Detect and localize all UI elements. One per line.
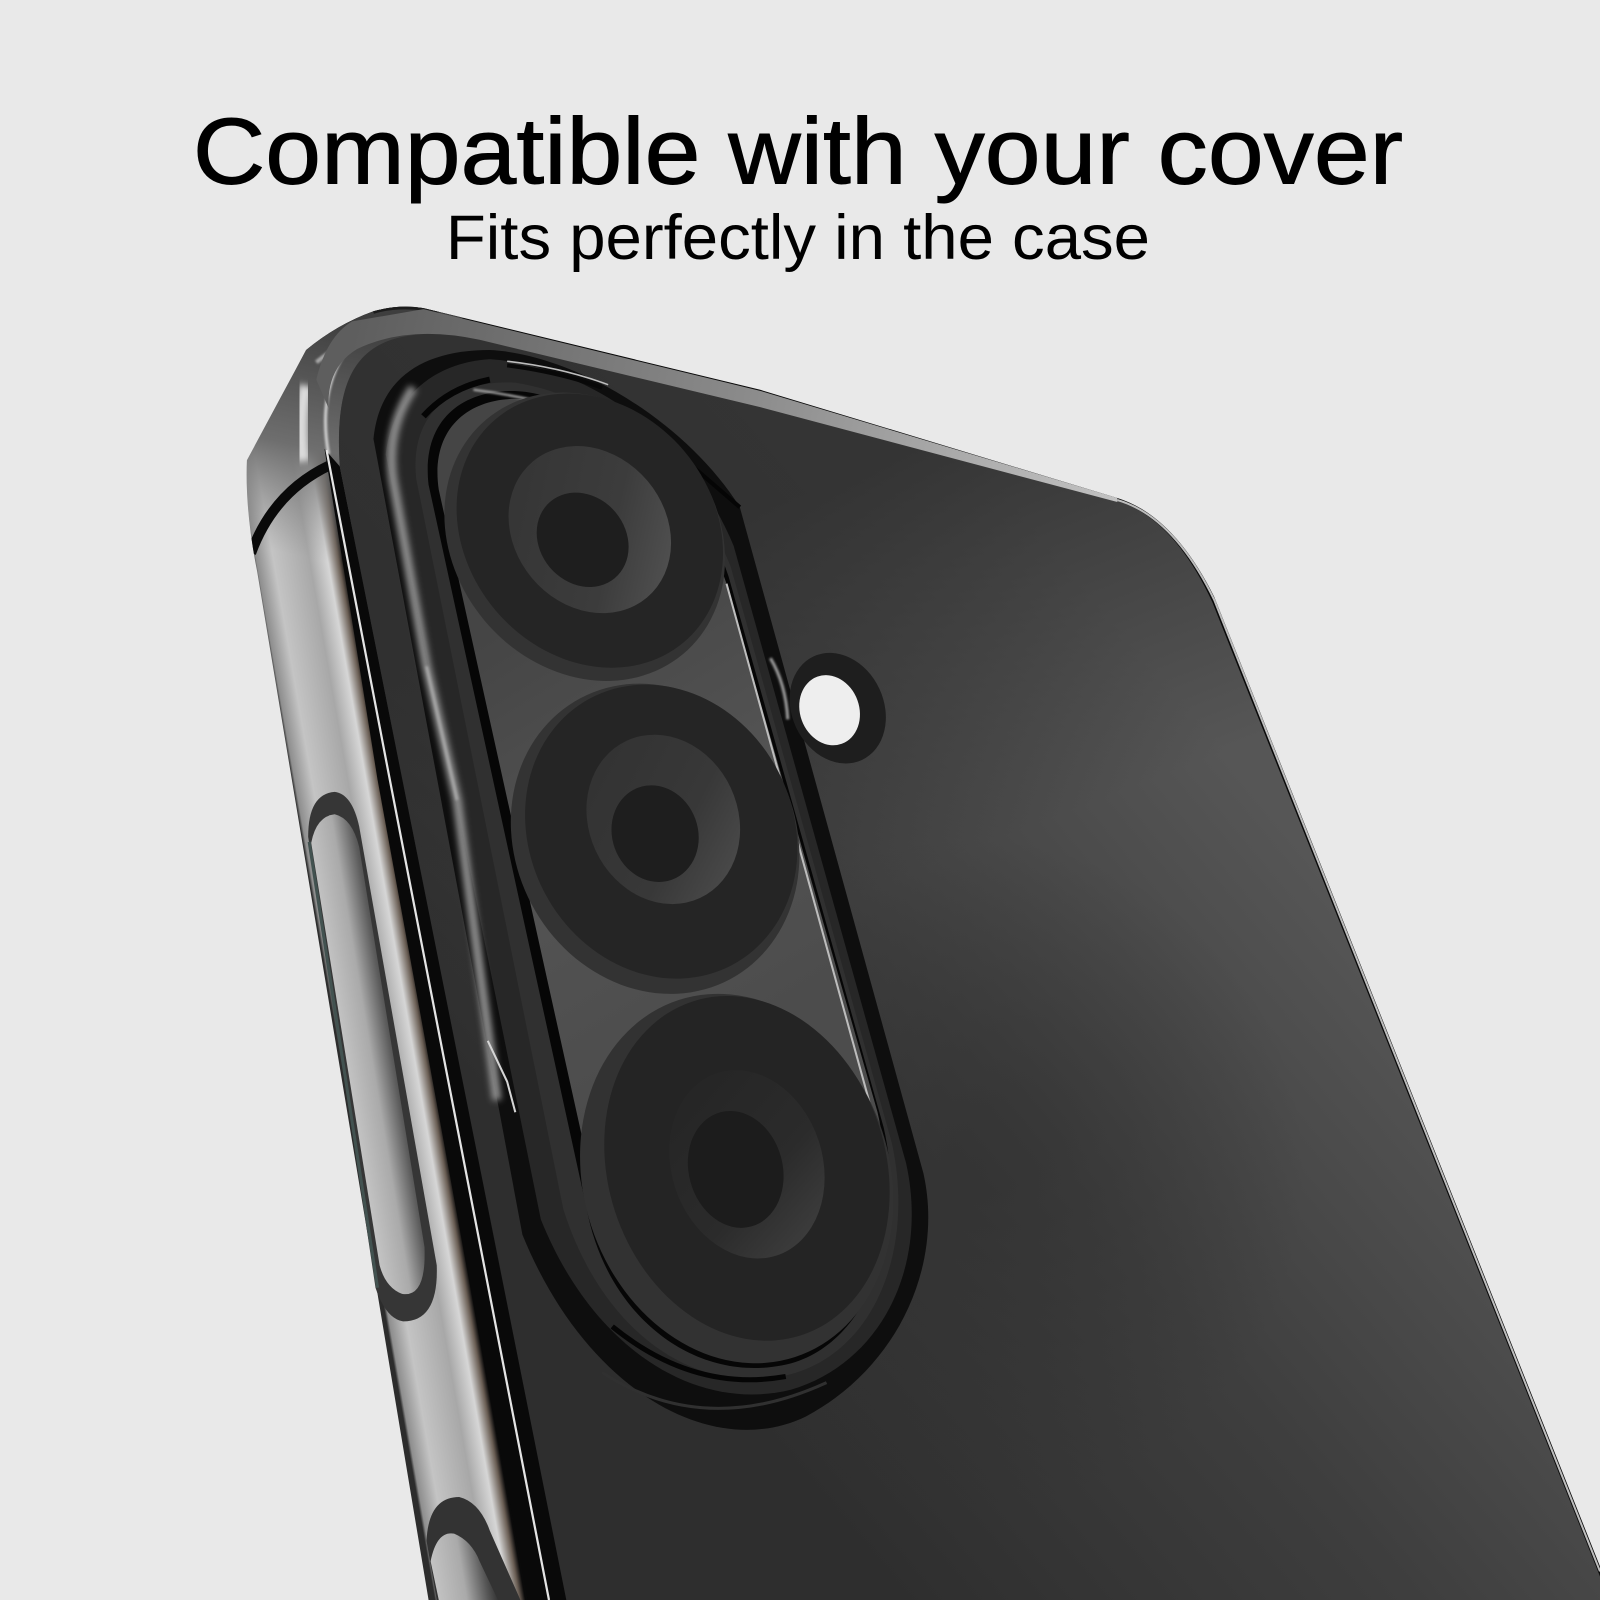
flash cutout bbox=[770, 637, 904, 779]
black inner band bbox=[324, 449, 567, 1600]
lens 1 bbox=[386, 336, 783, 738]
outer black ring bbox=[373, 350, 928, 1430]
lens 3 bbox=[533, 953, 940, 1404]
top edge highlight strip bbox=[316, 309, 1117, 502]
ring highlights bbox=[391, 361, 869, 1408]
side button 1 bbox=[308, 792, 437, 1321]
top corner of case bbox=[246, 306, 462, 556]
lens plate bbox=[437, 399, 885, 1362]
back glass panel bbox=[339, 333, 1600, 1600]
subtitle: Fits perfectly in the case bbox=[446, 203, 1150, 273]
glass shading bbox=[339, 333, 1600, 1600]
side button 2 bbox=[427, 1497, 520, 1600]
title: Compatible with your cover bbox=[193, 99, 1403, 204]
raised clear ring bbox=[386, 359, 912, 1394]
right edge highlight bbox=[1117, 500, 1600, 1571]
inner black ring bbox=[428, 391, 891, 1368]
white edge line bbox=[327, 450, 549, 1600]
lens 2 bbox=[457, 633, 853, 1045]
phone silhouette and side frame bbox=[247, 307, 1600, 1600]
camera island bbox=[373, 336, 940, 1430]
middle band bbox=[415, 382, 898, 1379]
phone in clear case bbox=[240, 302, 1600, 1600]
